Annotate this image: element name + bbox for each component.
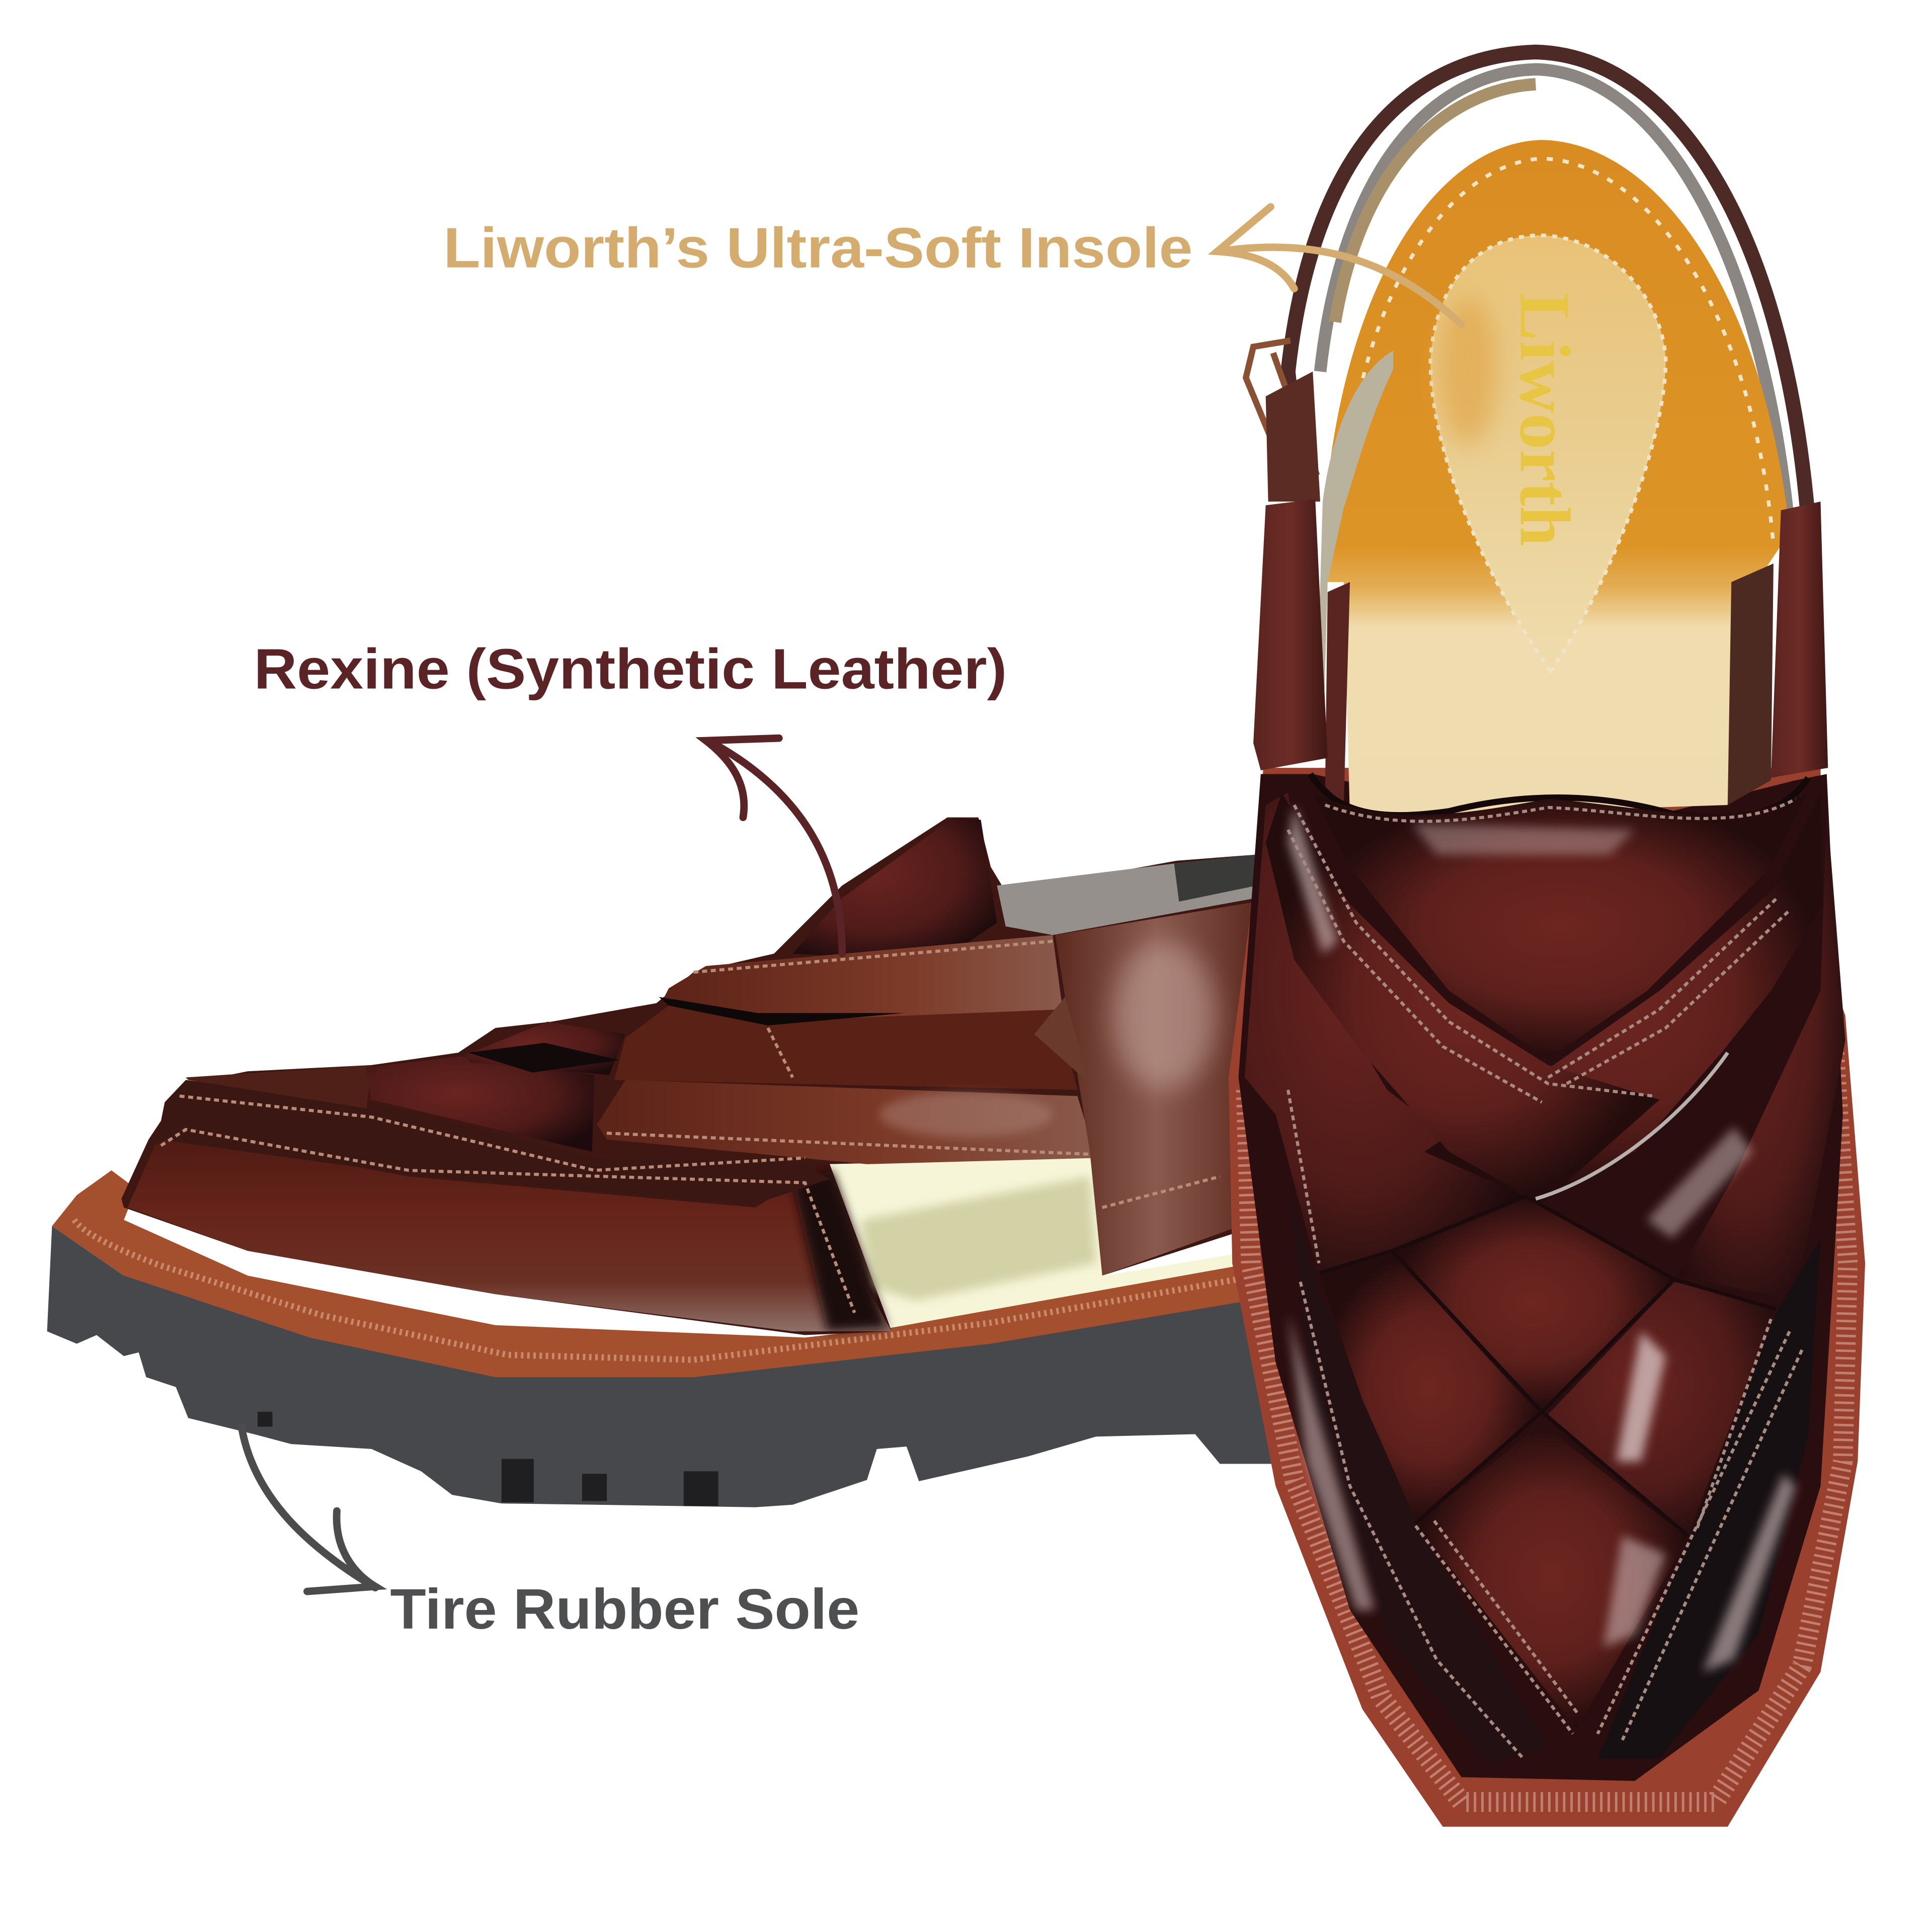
Liworth logo on insole: Liworth <box>1505 292 1585 546</box>
buckle strap <box>1266 371 1320 502</box>
insole <box>1325 140 1790 818</box>
silver strap edge <box>1536 1053 1728 1199</box>
shaded insole area <box>861 1176 1096 1301</box>
buckle <box>1246 341 1315 470</box>
top view shoe <box>1229 52 1865 1827</box>
right crossing strap <box>1424 792 1823 1201</box>
inner dark right wall <box>1728 564 1774 805</box>
back strap arch <box>1288 52 1808 520</box>
strap buckle tab <box>1034 997 1090 1084</box>
tongue flap <box>792 818 997 956</box>
lower toe panel <box>128 1133 892 1331</box>
upper base <box>121 818 1257 1335</box>
inner dark left wall <box>1325 582 1350 805</box>
side view shoe <box>47 818 1275 1507</box>
left lower toe wing <box>1288 1189 1548 1765</box>
woven panel two <box>464 1022 625 1075</box>
dark back strap segment <box>1174 854 1257 902</box>
vamp heart panel <box>1313 792 1808 1059</box>
side strap highlight <box>879 1092 1053 1137</box>
back strap tan lining <box>1335 84 1536 322</box>
woven panel centre <box>1392 1196 1674 1409</box>
insole seen through opening <box>830 1158 1239 1328</box>
weave seam lines <box>1319 1196 1776 1536</box>
label: sole arrow <box>242 1427 375 1591</box>
black burnish at panel end <box>792 1170 887 1331</box>
label: sole text: Tire Rubber Sole <box>390 1577 859 1641</box>
lizard texture on sole <box>1246 1028 1848 1802</box>
shine highlights <box>1288 805 1796 1672</box>
dark upper base <box>1239 774 1843 1781</box>
orange welt <box>52 1170 1251 1377</box>
label: insole arrow <box>1218 207 1462 325</box>
black slit lower <box>468 1043 619 1073</box>
label: insole text: Liworth’s Ultra-Soft Insole <box>443 216 1192 280</box>
lower strap <box>597 1080 1096 1164</box>
rubber sole <box>47 1226 1275 1507</box>
label: rexine arrow <box>706 738 842 953</box>
silver back strap <box>997 854 1257 935</box>
right lower toe wing <box>1597 1239 1820 1758</box>
insole outer stitching <box>1344 158 1774 545</box>
vertical strap <box>1055 902 1257 1275</box>
orange shading on pad left <box>1438 297 1497 446</box>
black slit <box>659 997 904 1025</box>
back strap inner lining <box>1320 69 1788 520</box>
sole tread notches <box>258 1412 718 1506</box>
right heel tab <box>1771 502 1828 778</box>
vamp collar edge <box>1310 774 1808 817</box>
woven panel three <box>614 997 1078 1090</box>
right edge strap <box>1678 805 1845 1301</box>
stitching on top shoe <box>1288 799 1802 1758</box>
woven panel toe <box>1416 1424 1688 1729</box>
top strap <box>663 935 1063 1022</box>
woven panel right <box>1548 1282 1776 1535</box>
vertical strap highlight <box>1112 941 1216 1090</box>
woven panel left <box>1319 1253 1540 1519</box>
sole outer <box>1229 768 1865 1827</box>
left side lining sliver <box>1315 351 1393 756</box>
left crossing strap <box>1266 792 1659 1204</box>
stitch lines on side upper <box>161 941 1220 1313</box>
left heel tab <box>1253 499 1328 770</box>
dark toe band <box>157 1080 830 1204</box>
left edge strap <box>1245 792 1530 1275</box>
welt stitched texture <box>74 1220 1245 1360</box>
toe cap panel <box>186 1065 371 1108</box>
woven panel one <box>365 1057 595 1152</box>
heel pad teardrop <box>1430 235 1666 671</box>
label: rexine text: Rexine (Synthetic Leather) <box>254 637 1007 701</box>
